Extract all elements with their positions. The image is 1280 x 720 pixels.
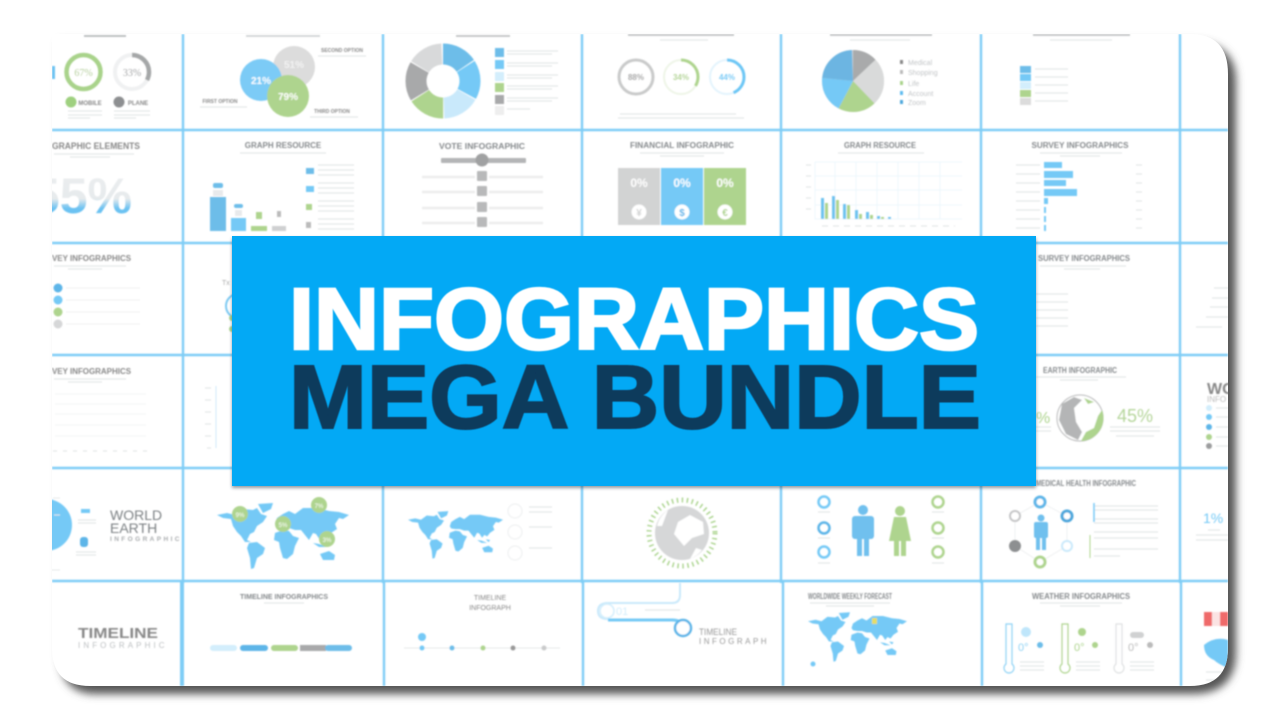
panel: vote infographic: VOTE INFOGRAPHIC (439, 142, 525, 151)
panel: percent rings: 34% (673, 73, 689, 82)
panel: timeline cover (78, 626, 168, 650)
panel: survey row three right: SURVEY INFOGRAPHICS (1038, 254, 1131, 263)
panel: earth infographic: % (1036, 410, 1050, 427)
dollar box: $ (679, 208, 685, 219)
panel: canada flag and map (1204, 612, 1228, 680)
panel: progress donuts: MOBILE (78, 101, 102, 107)
panel: graph resource bar chart (806, 141, 962, 226)
panel: timeline cover: TIMELINE (78, 626, 158, 642)
panel: timeline dots: TIMELINE (474, 595, 506, 602)
panel: timeline dots: INFOGRAPH (469, 605, 511, 612)
panel: worldwide weekly forecast: WORLDWIDE WEEKLY FORECAST (808, 592, 892, 601)
panel: venn diagram: THIRD OPTION (314, 109, 350, 115)
panel: weather infographics: WEATHER INFOGRAPHICS (1032, 592, 1131, 601)
centre figure (1034, 514, 1048, 550)
panel: segmented donut (416, 36, 558, 115)
dollar box: 0% (673, 176, 691, 190)
heading: mega bundle: MEGA BUNDLE (289, 348, 981, 448)
heading: infographics: INFOGRAPHICS (289, 271, 979, 368)
pie legend: Account (908, 91, 933, 98)
panel: one percent stat: 1% (1203, 510, 1223, 526)
panel: pie chart (822, 35, 938, 112)
dollar box (661, 168, 703, 225)
thermometer: cold: 0° (1018, 642, 1029, 654)
panel: financial infographic (618, 141, 746, 225)
panel: timeline bars (210, 594, 352, 651)
panel: venn diagram (200, 36, 366, 117)
panel: world earth cover: INFOGRAPHIC (110, 536, 182, 543)
panel: world map with badges: 7% (315, 504, 324, 510)
panel: timeline bars: TIMELINE INFOGRAPHICS (240, 594, 328, 601)
panel: venn diagram: 21% (251, 76, 271, 87)
panel: world earth cover: EARTH (110, 520, 157, 536)
panel: survey row four left: VEY INFOGRAPHICS (52, 367, 132, 376)
pie legend: Life (908, 81, 919, 88)
panel: survey legend (1020, 35, 1130, 105)
panel: world earth cover (52, 498, 180, 570)
female figure (889, 506, 911, 556)
panel: earth infographic (1035, 366, 1160, 441)
thermometer: cloud: 0° (1128, 642, 1139, 654)
euro box (704, 168, 746, 225)
yen box: ¥ (636, 208, 642, 219)
panel: graph resource bar chart: GRAPH RESOURCE (844, 141, 917, 150)
panel: right column labels (1196, 288, 1228, 327)
panel: venn diagram: 79% (278, 92, 298, 103)
panel: earth infographic: 45% (1117, 406, 1153, 426)
panel: survey row four left (52, 367, 148, 451)
panel: progress donuts: PLANE (128, 101, 148, 107)
euro box: 0% (716, 176, 734, 190)
panel: medical health (1010, 479, 1158, 567)
legend (495, 48, 558, 115)
panel: graph resource bottles (210, 141, 354, 231)
panel: timeline curve: 01 (616, 606, 628, 618)
panel: world legend (1205, 382, 1228, 450)
panel: graphic elements (52, 142, 140, 214)
panel: axis chart (205, 386, 216, 448)
panel: timeline cover: INFOGRAPHIC (78, 641, 168, 650)
thermometer: cold (1004, 624, 1044, 673)
panel: timeline curve: TIMELINE (699, 627, 737, 637)
panel: progress donuts (52, 36, 150, 118)
donut: 67 percent: 67% (74, 68, 93, 79)
panel: earth infographic: EARTH INFOGRAPHIC (1043, 366, 1117, 375)
panel: venn diagram: FIRST OPTION (202, 99, 238, 105)
panel: survey row three middle (222, 279, 232, 333)
panel: world map with badges (217, 497, 349, 569)
title banner (232, 236, 1036, 486)
panel: percent rings (618, 35, 744, 118)
panel: world map with badges: 3% (323, 538, 332, 544)
panel: timeline curve: INFOGRAPH (699, 637, 769, 646)
panel: human body figures (818, 496, 944, 563)
yen box: 0% (630, 176, 648, 190)
pie legend (900, 60, 938, 107)
male figure (852, 505, 874, 556)
panel: graphic elements: 55% (32, 168, 132, 224)
panel: graphic elements: GRAPHIC ELEMENTS (52, 141, 140, 151)
panel: weather infographics (1004, 592, 1154, 673)
euro box: € (722, 208, 728, 219)
panel: world legend: WO (1207, 381, 1235, 398)
panel: world map with list (408, 504, 552, 560)
panel: vote infographic (422, 142, 543, 227)
panel: percent rings: 88% (628, 73, 644, 82)
panel: survey row three middle: Tx (222, 280, 230, 287)
yen box (618, 168, 660, 225)
thermometer: sun: 0° (1074, 642, 1085, 654)
panel: globe with radial ticks (649, 500, 715, 566)
pie legend: Zoom (908, 100, 926, 107)
thermometer: cloud (1114, 624, 1154, 673)
donut: 33 percent: 33% (123, 68, 141, 79)
panel: world legend: INFO (1207, 395, 1226, 404)
panel: worldwide weekly forecast (808, 592, 907, 666)
panel: venn diagram: SECOND OPTION (321, 48, 363, 54)
panel: world map with badges: 5% (279, 523, 288, 529)
panel: percent rings: 44% (719, 73, 735, 82)
panel: medical health: MEDICAL HEALTH INFOGRAPHIC (1036, 479, 1136, 488)
thermometer: sun (1060, 624, 1100, 673)
panel: venn diagram: 51% (284, 60, 304, 71)
panel: one percent stat (1196, 510, 1228, 540)
panel: survey row three left: VEY INFOGRAPHICS (52, 254, 132, 263)
panel: timeline dots (404, 595, 560, 650)
panel: survey bars (1016, 141, 1142, 231)
panel: timeline curve (598, 583, 769, 646)
panel: financial infographic: FINANCIAL INFOGRAPHIC (630, 141, 734, 150)
panel: survey bars: SURVEY INFOGRAPHICS (1032, 141, 1129, 150)
pie legend: Shopping (908, 70, 938, 77)
panel: survey row three left (52, 254, 140, 328)
panel: graph resource bottles: GRAPH RESOURCE (245, 141, 322, 150)
panel: survey row three right (1036, 254, 1131, 326)
panel: world earth cover: WORLD (110, 507, 162, 523)
pie legend: Medical (908, 60, 933, 67)
banner shadow (232, 238, 1036, 488)
panel: world map with badges: 9% (236, 513, 245, 519)
